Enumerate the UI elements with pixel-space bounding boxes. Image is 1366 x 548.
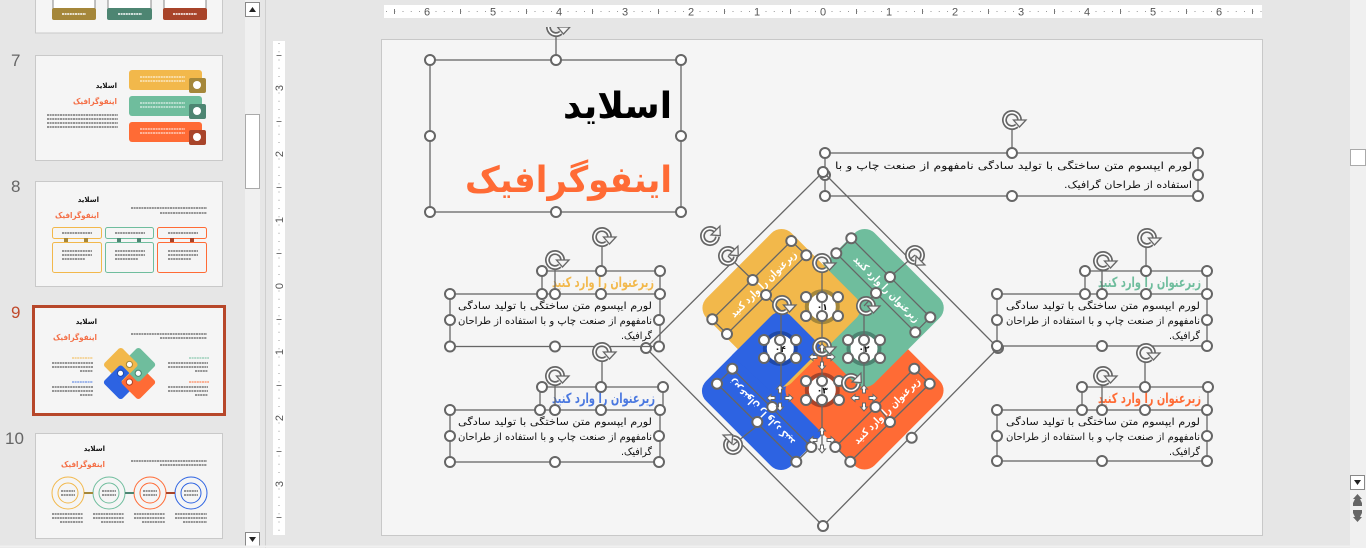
vertical ruler: 2 xyxy=(274,415,286,421)
thumbnail 8: اسلاید xyxy=(78,196,99,204)
badge 01 xyxy=(805,289,840,324)
horizontal ruler: 5 xyxy=(1150,6,1156,18)
thumbnail number 7: 7 xyxy=(11,51,20,70)
thumbnail 10 xyxy=(36,434,222,538)
thumbnail 8 xyxy=(36,182,222,286)
panel: yellow xyxy=(697,223,866,393)
right scrollbar xyxy=(1350,0,1366,548)
body right top: گرافیک. xyxy=(1169,330,1200,342)
diamond graphic xyxy=(696,223,950,476)
body left bottom: نامفهوم از صنعت چاپ و با استفاده از طراحان xyxy=(458,432,652,443)
label green: زیرعنوان را وارد کنید xyxy=(851,254,922,325)
selection right top xyxy=(992,231,1212,351)
horizontal ruler: 2 xyxy=(688,6,694,18)
body right top xyxy=(1006,300,1200,342)
badge 04: ۰۴ xyxy=(775,345,786,355)
thumbnail 10: اسلاید xyxy=(84,445,105,453)
badge 03: ۰۳ xyxy=(817,386,828,396)
thumbnail 8: اینفوگرافیک xyxy=(55,210,99,220)
vertical ruler: 1 xyxy=(274,217,286,223)
thumbnail 10: اینفوگرافیک xyxy=(61,459,105,469)
subtitle right top: زیرعنوان را وارد کنید xyxy=(1098,275,1201,291)
horizontal ruler: 1 xyxy=(886,6,892,18)
subtitle right bottom: زیرعنوان را وارد کنید xyxy=(1098,391,1201,407)
left scrollbar xyxy=(245,0,266,548)
horizontal ruler: 3 xyxy=(1018,6,1024,18)
subtitle left bottom: زیرعنوان را وارد کنید xyxy=(552,391,655,407)
badge 01: ۰۱ xyxy=(817,303,828,313)
thumbnail 6 (partial) xyxy=(36,0,222,33)
vertical ruler: 3 xyxy=(274,85,286,91)
intro paragraph: استفاده از طراحان گرافیک. xyxy=(1064,179,1192,191)
body left bottom: لورم ایپسوم متن ساختگی با تولید سادگی xyxy=(458,416,652,428)
body right top: نامفهوم از صنعت چاپ و با استفاده از طراحان xyxy=(1006,316,1200,327)
badge 04 xyxy=(763,331,798,366)
selection left bottom xyxy=(445,345,668,467)
vertical ruler: 3 xyxy=(274,481,286,487)
vertical ruler: 2 xyxy=(274,151,286,157)
horizontal ruler: 0 xyxy=(820,6,826,18)
body right bottom: لورم ایپسوم متن ساختگی با تولید سادگی xyxy=(1006,416,1200,428)
thumbnail 9 selected: اینفوگرافیک xyxy=(53,332,97,342)
selection left top xyxy=(445,230,665,352)
thumbnail number 9: 9 xyxy=(11,303,20,322)
panel: blue xyxy=(696,306,866,476)
vertical ruler xyxy=(273,41,286,535)
horizontal ruler: 6 xyxy=(424,6,430,18)
thumbnail number 8: 8 xyxy=(11,177,20,196)
intro selection box xyxy=(820,113,1203,201)
subtitle left top: زیرعنوان را وارد کنید xyxy=(552,275,654,291)
rotation handles on diamond xyxy=(699,221,930,456)
badge 02: ۰۲ xyxy=(858,345,870,355)
body right bottom: گرافیک. xyxy=(1169,446,1200,458)
panel: green xyxy=(780,223,950,393)
title block xyxy=(465,86,672,201)
horizontal ruler: 6 xyxy=(1216,6,1222,18)
body right top: لورم ایپسوم متن ساختگی با تولید سادگی xyxy=(1006,300,1200,312)
body right bottom: نامفهوم از صنعت چاپ و با استفاده از طراحان xyxy=(1006,432,1200,443)
move cursors xyxy=(767,344,877,453)
title block: اینفوگرافیک xyxy=(465,159,672,201)
title selection box xyxy=(425,20,686,217)
label yellow: زیرعنوان را وارد کنید xyxy=(728,249,799,320)
thumbnail 7: اسلاید xyxy=(96,82,117,90)
vertical ruler: 1 xyxy=(274,349,286,355)
label blue, upside down: زیرعنوان را وارد کنید xyxy=(726,376,798,448)
intro paragraph: لورم ایپسوم متن ساختگی با تولید سادگی نامفهوم از صنعت چاپ و با xyxy=(835,160,1192,172)
horizontal ruler: 1 xyxy=(754,6,760,18)
body left top: گرافیک. xyxy=(621,330,652,342)
selection right bottom xyxy=(992,346,1213,466)
horizontal ruler xyxy=(384,5,1262,18)
body left top: لورم ایپسوم متن ساختگی با تولید سادگی xyxy=(458,300,652,312)
rotated text box selections xyxy=(707,233,935,467)
badge selection handles xyxy=(759,292,885,405)
horizontal ruler: 3 xyxy=(622,6,628,18)
body left bottom xyxy=(458,416,652,458)
thumbnail 9 selected xyxy=(34,306,224,414)
body left top: نامفهوم از صنعت چاپ و با استفاده از طراحان xyxy=(458,316,652,327)
label orange: زیرعنوان را وارد کنید xyxy=(851,375,923,447)
thumbnail 7: اینفوگرافیک xyxy=(73,96,117,106)
diamond selection outline xyxy=(641,167,1003,531)
slide canvas xyxy=(382,40,1262,536)
body right bottom xyxy=(1006,416,1200,458)
horizontal ruler: 2 xyxy=(952,6,958,18)
thumbnail 7 xyxy=(36,56,222,160)
horizontal ruler: 5 xyxy=(490,6,496,18)
thumbnail number 10: 10 xyxy=(5,429,24,448)
badge 03 xyxy=(805,372,840,408)
panel: blue overlap over yellow xyxy=(732,313,820,387)
horizontal ruler: 4 xyxy=(1084,6,1090,18)
body left top xyxy=(458,300,652,342)
body left bottom: گرافیک. xyxy=(621,446,652,458)
thumbnail 9 selected: اسلاید xyxy=(76,318,97,326)
badge 02 xyxy=(846,331,882,366)
vertical ruler: 0 xyxy=(274,283,286,289)
panel: orange xyxy=(780,306,949,475)
title block: اسلاید xyxy=(563,86,672,127)
intro paragraph xyxy=(835,160,1192,191)
horizontal ruler: 4 xyxy=(556,6,562,18)
